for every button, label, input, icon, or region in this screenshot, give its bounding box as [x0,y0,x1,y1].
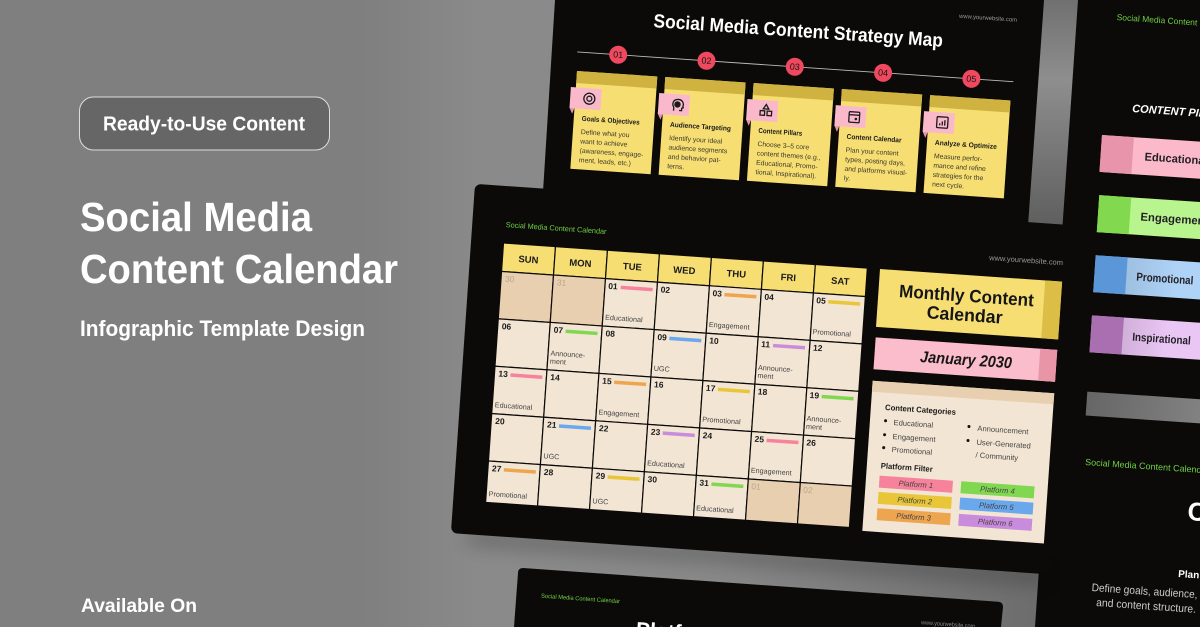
timeline: 02 [701,55,712,66]
main title: Content Calendar [80,246,398,292]
card: content calendar [830,89,922,192]
slide content: pillars and right edge slides [1083,12,1200,616]
week 2 entries: 08 [605,328,616,339]
week 4 entries: 26 [806,437,817,448]
platform chips [877,476,1035,531]
week 1 entries: 04 [764,292,774,302]
category list: / Community [975,451,1019,462]
pillar: inspirational [1089,315,1200,362]
website url: www.yourwebsite.com [988,253,1063,267]
week 1 entries: 03 [712,288,723,299]
card: content calendar: ly. [844,175,850,183]
platform chips: Platform 6 [978,517,1014,528]
card: content calendar: types, posting days, [845,156,905,168]
week 4 entries: 24 [702,430,713,441]
card: analyze and optimize: next cycle. [932,181,964,190]
card: goals and objectives [565,71,657,174]
available on: Available On [81,596,197,617]
week 3 entries: Educational [495,400,533,412]
card: content pillars: Educational, Promo- [756,160,818,171]
platform filter heading: Platform Filter [881,461,933,474]
card: goals and objectives: Goals & Objectives [581,116,640,127]
plan label: Plan [1178,569,1200,581]
week 2 entries [499,321,823,384]
timeline: 04 [878,67,888,78]
week 4 entries: 22 [599,423,609,434]
panel: january 2030: January 2030 [920,349,1013,372]
card: goals and objectives: ment, leads, etc.) [579,157,631,168]
week 2 entries: Announce- [550,349,586,360]
weekday header: TUE [622,261,642,274]
week 4 entries: Educational [647,458,685,470]
week 3 entries: 16 [654,379,664,390]
timeline: 01 [613,49,624,60]
week 1 entries: 05 [816,295,826,306]
platform chips: Platform 5 [979,501,1015,512]
week 3 entries: 15 [602,376,612,386]
card: content pillars [742,83,834,186]
website url: www.yourwebsite.com [958,14,1017,24]
week 4 entries: 23 [651,427,661,437]
panel: monthly content calendar title: Calendar [926,302,1003,328]
week 1 entries [503,274,861,339]
week 4 entries: 21 [547,419,557,430]
subtitle: Infographic Template Design [80,316,365,341]
weekday header: THU [726,268,747,281]
card: analyze and optimize [919,95,1010,198]
week 1 entries: Educational [605,313,643,324]
weekday header: SUN [518,254,539,266]
badge: ready-to-use content: Ready-to-Use Content [103,114,305,136]
category list: Promotional [891,445,933,457]
week 1 entries: 01 [608,281,618,291]
platform chips: Platform 3 [896,511,932,523]
card: analyze and optimize: Analyze & Optimize [935,140,997,151]
card: content calendar: and platforms visual- [844,166,907,177]
main title: Social Media [80,194,313,240]
category list [882,417,1032,464]
card: goals and objectives: Define what you [581,129,630,139]
week 3 entries: 14 [550,372,560,383]
calendar grid [486,243,867,528]
slide: strategy map [543,0,1044,226]
week 5 entries [488,463,813,520]
green slide header: Social Media Content Calendar [505,220,607,236]
category list: Announcement [977,424,1030,436]
weekday header: MON [569,258,592,270]
week 4 entries: 20 [495,416,505,427]
weekday header [502,243,867,297]
week 2 entries: 12 [813,343,823,353]
week 2 entries: ment [757,371,774,381]
slide: monthly calendar [450,184,1074,585]
week 2 entries: ment [550,356,566,367]
week 1 entries: Engagement [709,320,750,332]
week 1 entries: Promotional [812,327,852,339]
pillar list [1083,135,1200,426]
panel: monthly content calendar title: Monthly Content [898,281,1034,310]
card: audience targeting [654,77,746,180]
week 2 entries: 06 [501,321,512,332]
week 4 entries: UGC [543,451,560,461]
week 3 entries: Engagement [598,407,640,419]
week 1 entries: 30 [505,274,515,284]
panel: categories and filters [862,381,1054,543]
card: content pillars: tional, Inspirational). [755,169,817,180]
week 4 entries: Engagement [751,466,792,477]
pillar: engagement [1097,195,1200,242]
card: goals and objectives: want to achieve [579,138,628,149]
platform chips: Platform 2 [897,495,933,506]
week 5 entries: 31 [699,478,710,488]
content categories heading: Content Categories [885,403,957,417]
day cells [486,271,865,528]
green header bottom slide: Social Media Content Calendar [541,594,620,605]
week 5 entries: 28 [543,467,554,477]
grey bar [1086,392,1200,426]
platform chips: Platform 4 [980,484,1015,496]
card: audience targeting: audience segments [668,144,728,155]
timeline: 05 [966,74,977,84]
week 2 entries: 10 [709,335,719,346]
category list: User-Generated [976,438,1031,450]
weekday header: FRI [780,272,796,284]
week 4 entries [493,416,817,479]
card: content calendar: Content Calendar [846,134,902,145]
week 5 entries: Promotional [488,489,528,501]
week 5 entries: Educational [696,503,734,515]
week 5 entries: 01 [751,481,761,492]
platform chips: Platform 1 [898,479,933,490]
week 3 entries: ment [806,422,822,432]
card: audience targeting: Audience Targeting [670,122,731,133]
right slide background [1035,0,1200,627]
card: audience targeting: Identify your ideal [669,135,723,146]
card: content pillars: Content Pillars [758,128,803,138]
pillar: inspirational: Inspirational [1132,332,1191,348]
strategy map title: Social Media Content Strategy Map [653,11,944,52]
card: content calendar: Plan your content [845,147,899,158]
category list: Engagement [892,432,937,444]
panel: january 2030 [873,337,1057,382]
week 5 entries: 02 [803,485,813,495]
week 3 entries: 19 [809,390,820,401]
week 2 entries: Announce- [758,363,794,374]
week 5 entries: UGC [592,496,609,506]
week 5 entries: 29 [595,470,606,481]
timeline [577,43,1014,91]
week 4 entries: 25 [754,434,765,444]
category list: Educational [893,418,934,430]
week 2 entries: 11 [761,339,771,350]
pillar: educational [1099,135,1200,182]
badge: ready-to-use content [80,97,330,150]
card: analyze and optimize: mance and refine [933,162,986,173]
week 2 entries: 07 [553,325,564,335]
plan description: and content structure. [1096,597,1196,616]
left text column [80,97,398,617]
card: content pillars: content themes (e.g., [757,150,821,162]
week 5 entries: 27 [492,463,502,474]
slide: platform, bottom [514,568,1003,627]
week 1 entries: 02 [660,284,671,295]
week 2 entries: 09 [657,332,667,342]
timeline: 03 [789,61,800,72]
pillar: promotional [1093,255,1200,302]
week 1 entries: 31 [557,277,567,288]
card: analyze and optimize: Measure perfor- [934,153,982,163]
card: analyze and optimize: strategies for the [932,172,984,182]
week 3 entries: Promotional [702,415,741,426]
weekday header: SAT [831,276,850,288]
card: audience targeting: terns. [667,163,685,171]
week 3 entries: 17 [706,383,716,393]
week 3 entries: 18 [758,386,768,397]
card: audience targeting: and behavior pat- [668,154,721,164]
week 3 entries: Announce- [806,414,842,425]
plan description [1091,582,1198,616]
week 3 entries: 13 [498,368,509,379]
weekday header: WED [673,265,696,277]
week 2 entries: UGC [653,364,670,374]
card: content pillars: Choose 3–5 core [757,141,810,152]
week 5 entries: 30 [647,474,658,485]
week 3 entries [495,368,854,434]
card: goals and objectives: (awareness, engage- [579,148,643,159]
panel: monthly content calendar title [876,269,1062,339]
